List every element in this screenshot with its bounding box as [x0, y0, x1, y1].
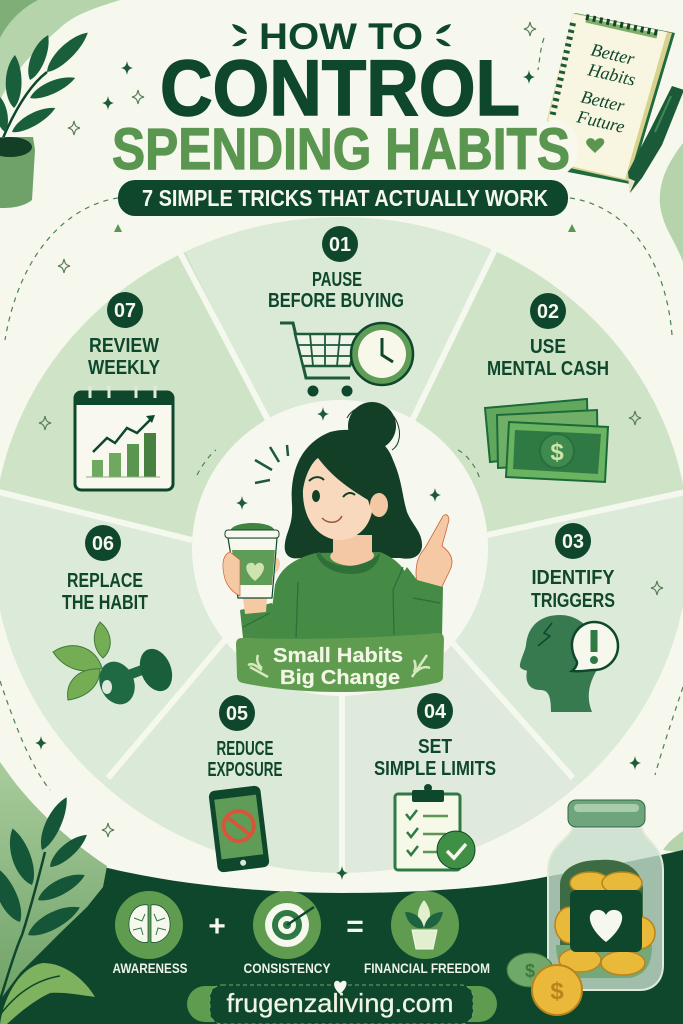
step 06: 06: [92, 533, 114, 555]
step 01: 01: [329, 234, 351, 256]
step 04: SIMPLE LIMITS: [374, 758, 496, 780]
step 05: 05: [226, 703, 248, 725]
icon: jar of coins: [507, 800, 663, 1015]
icon: head with alert: [520, 615, 618, 712]
icon: notebook: Habits: [585, 59, 637, 90]
title: HOW TO: [259, 16, 423, 57]
step 06: REPLACE: [67, 570, 143, 592]
wheel spokes: [0, 245, 683, 875]
icon: dumbbell with leaves: [53, 622, 178, 710]
centre circle: [192, 400, 488, 696]
attention lines: [255, 445, 288, 483]
step 02: MENTAL CASH: [487, 358, 609, 380]
arm under cup: [243, 598, 267, 614]
icon: cash: $: [550, 439, 564, 466]
step 07: REVIEW: [89, 335, 159, 357]
icon: notebook: [545, 13, 683, 193]
icon: jar of coins: $: [550, 978, 564, 1005]
step 03: TRIGGERS: [531, 590, 615, 612]
step 03: 03: [562, 531, 584, 553]
equation: financial freedom: FINANCIAL FREEDOM: [364, 960, 490, 976]
equation: consistency: CONSISTENCY: [244, 960, 331, 976]
title: SPENDING HABITS: [112, 117, 570, 182]
equals: =: [346, 910, 364, 943]
step 04: 04: [424, 701, 447, 723]
hair: [285, 430, 422, 559]
step 05: EXPOSURE: [208, 759, 282, 781]
step 03: [520, 523, 618, 712]
cup: [275, 557, 280, 574]
character: [223, 402, 452, 640]
ear and face: [370, 493, 388, 517]
sweater: [268, 552, 412, 640]
icon: notebook: Better: [579, 86, 627, 116]
icon: jar of coins: $: [525, 961, 535, 981]
step 07: 07: [114, 300, 136, 322]
outlined sparkles: [39, 22, 663, 837]
icon: notebook: Better: [589, 39, 637, 69]
step 02: [485, 293, 609, 482]
step 01: PAUSE: [312, 269, 362, 291]
step 03: IDENTIFY: [532, 567, 615, 589]
step 05: REDUCE: [216, 738, 274, 760]
sparkles: [35, 61, 641, 880]
neck and collar: [330, 535, 374, 566]
title: [112, 16, 578, 182]
title leaves: [232, 24, 451, 46]
equation: financial freedom: [364, 891, 490, 976]
pen: [628, 86, 683, 193]
equation: consistency: [244, 891, 331, 976]
icon: notebook: Future: [574, 106, 627, 137]
subtitle pill: 7 SIMPLE TRICKS THAT ACTUALLY WORK: [142, 185, 548, 211]
banner: [236, 633, 444, 692]
step 02: 02: [537, 301, 559, 323]
banner: Small Habits: [273, 645, 403, 667]
step 06: THE HABIT: [62, 592, 148, 614]
icon: clipboard: [395, 784, 475, 870]
subtitle pill: [118, 180, 568, 216]
pointing hand: [416, 515, 452, 590]
step 02: USE: [530, 336, 566, 358]
equation: awareness: AWARENESS: [112, 960, 188, 976]
icon: calendar chart: [75, 386, 173, 490]
website pill: [187, 981, 497, 1024]
step 06: [53, 525, 178, 710]
wheel of seven wedges: [0, 200, 683, 900]
icon: cash: [485, 399, 608, 482]
banner: Big Change: [280, 667, 400, 689]
decorative dashed arcs: [0, 38, 683, 790]
plant bottom left: [0, 794, 95, 1024]
step 01: [268, 226, 413, 396]
icon: cart and clock: [280, 323, 413, 396]
step 04: [374, 693, 496, 870]
title: CONTROL: [160, 43, 520, 132]
step 04: SET: [418, 736, 452, 758]
step 05: [208, 695, 282, 873]
website pill: frugenzaliving.com: [226, 988, 454, 1018]
equation: awareness: [112, 891, 188, 976]
plus: +: [208, 910, 226, 943]
step 07: WEEKLY: [88, 357, 161, 379]
step 01: BEFORE BUYING: [268, 290, 404, 312]
step 07: [75, 292, 173, 490]
icon: potted plant top left: [0, 27, 92, 208]
icon: phone: [208, 785, 270, 873]
